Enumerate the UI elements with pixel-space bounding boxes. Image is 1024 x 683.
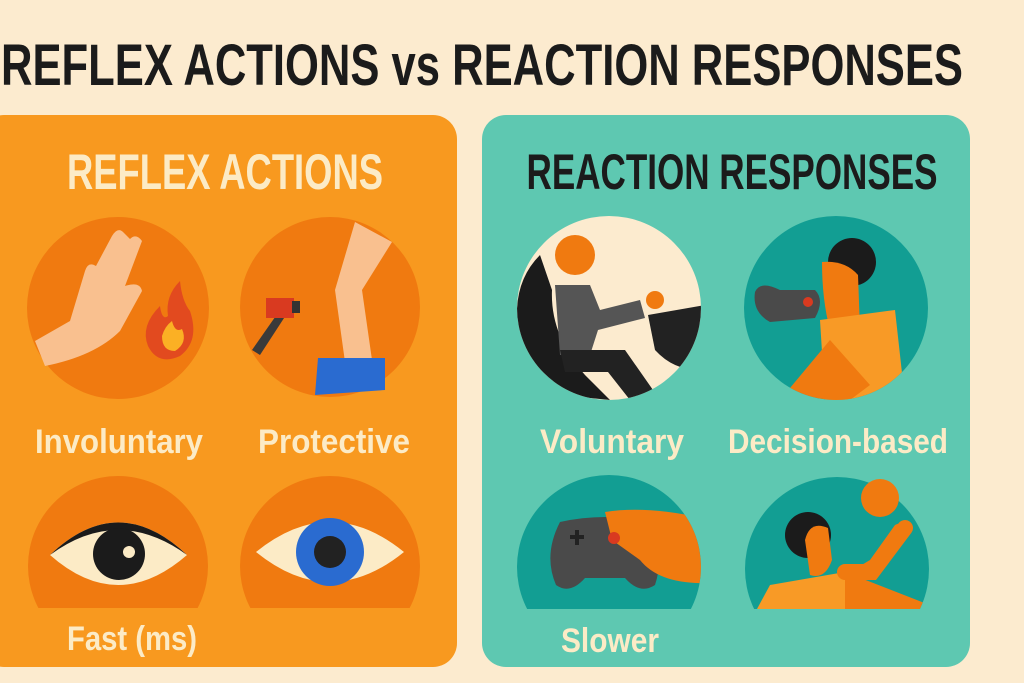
icon: eye black — [28, 476, 208, 608]
heading: reflex actions: REFLEX ACTIONS — [67, 144, 383, 200]
label: involuntary: Involuntary — [35, 423, 203, 461]
icon: driver — [517, 216, 705, 400]
label: fast: Fast (ms) — [67, 620, 197, 658]
icon: knee hammer — [240, 217, 420, 397]
icon: hand and fire — [27, 217, 209, 399]
panel: reaction responses — [482, 115, 970, 667]
panel: reflex actions — [0, 115, 457, 667]
label: decision-based: Decision-based — [728, 423, 948, 461]
icon: eye blue — [240, 476, 420, 608]
icon: catching ball — [745, 477, 929, 609]
icon: controller hand — [517, 475, 701, 609]
icon: person with controller — [744, 216, 928, 400]
label: slower: Slower — [561, 622, 659, 660]
label: protective: Protective — [258, 423, 410, 461]
label: voluntary: Voluntary — [540, 423, 684, 461]
